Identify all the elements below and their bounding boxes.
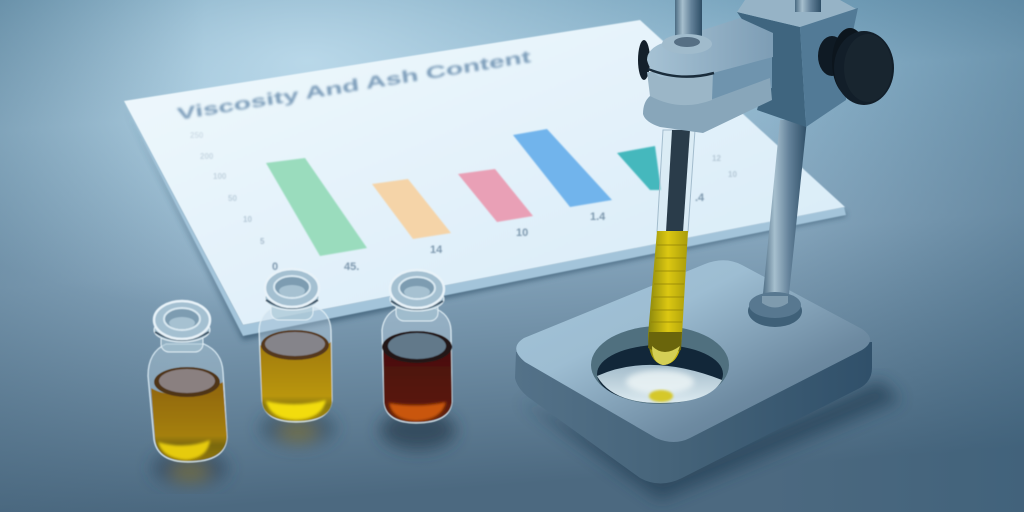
axis labels: .4 <box>695 192 705 204</box>
clamp assembly <box>638 0 894 133</box>
spacer <box>647 72 713 105</box>
axis labels: 0 <box>272 261 278 273</box>
stand pole <box>748 120 807 327</box>
panel: chart sheet <box>124 20 846 340</box>
bar: orange <box>372 179 451 239</box>
clamp block side <box>737 12 806 127</box>
axis labels: 10 <box>728 170 737 179</box>
axis labels: 1.4 <box>590 211 606 223</box>
axis labels: 100 <box>213 172 227 181</box>
bar: pink <box>458 169 533 222</box>
axis labels: 5 <box>260 237 265 246</box>
rear thumb knob <box>638 40 650 80</box>
stand base <box>515 260 900 500</box>
bar: blue <box>513 129 612 207</box>
vial: golden oil <box>259 269 332 422</box>
axis labels: 14 <box>430 244 443 256</box>
axis labels <box>190 131 737 273</box>
lower arm <box>643 78 772 133</box>
axis labels: 10 <box>516 227 528 239</box>
vial neck <box>390 270 444 321</box>
bar: green <box>266 158 367 256</box>
upper rod <box>675 0 702 38</box>
vial: dark red oil <box>382 270 452 423</box>
vial shadows and reflections <box>152 410 456 486</box>
clamp block right face <box>800 8 858 127</box>
axis labels: 10 <box>243 215 252 224</box>
bar chart <box>266 129 661 256</box>
axis labels: 45. <box>344 261 359 273</box>
clamp block top <box>737 0 858 27</box>
axis labels: 50 <box>228 194 237 203</box>
chart title: Viscosity And Ash Content <box>176 47 532 124</box>
vial: amber oil <box>148 301 227 462</box>
axis labels: 200 <box>200 152 214 161</box>
axis labels: 12 <box>712 154 721 163</box>
vial neck <box>265 269 319 320</box>
upper arm <box>647 18 773 77</box>
lower arm slot <box>712 55 772 102</box>
axis labels: 250 <box>190 131 204 140</box>
black knob <box>818 28 894 105</box>
test tube <box>648 130 695 365</box>
bar: teal <box>617 146 661 190</box>
vial neck <box>154 301 210 352</box>
sample hole <box>591 326 729 404</box>
top rod <box>795 0 821 12</box>
